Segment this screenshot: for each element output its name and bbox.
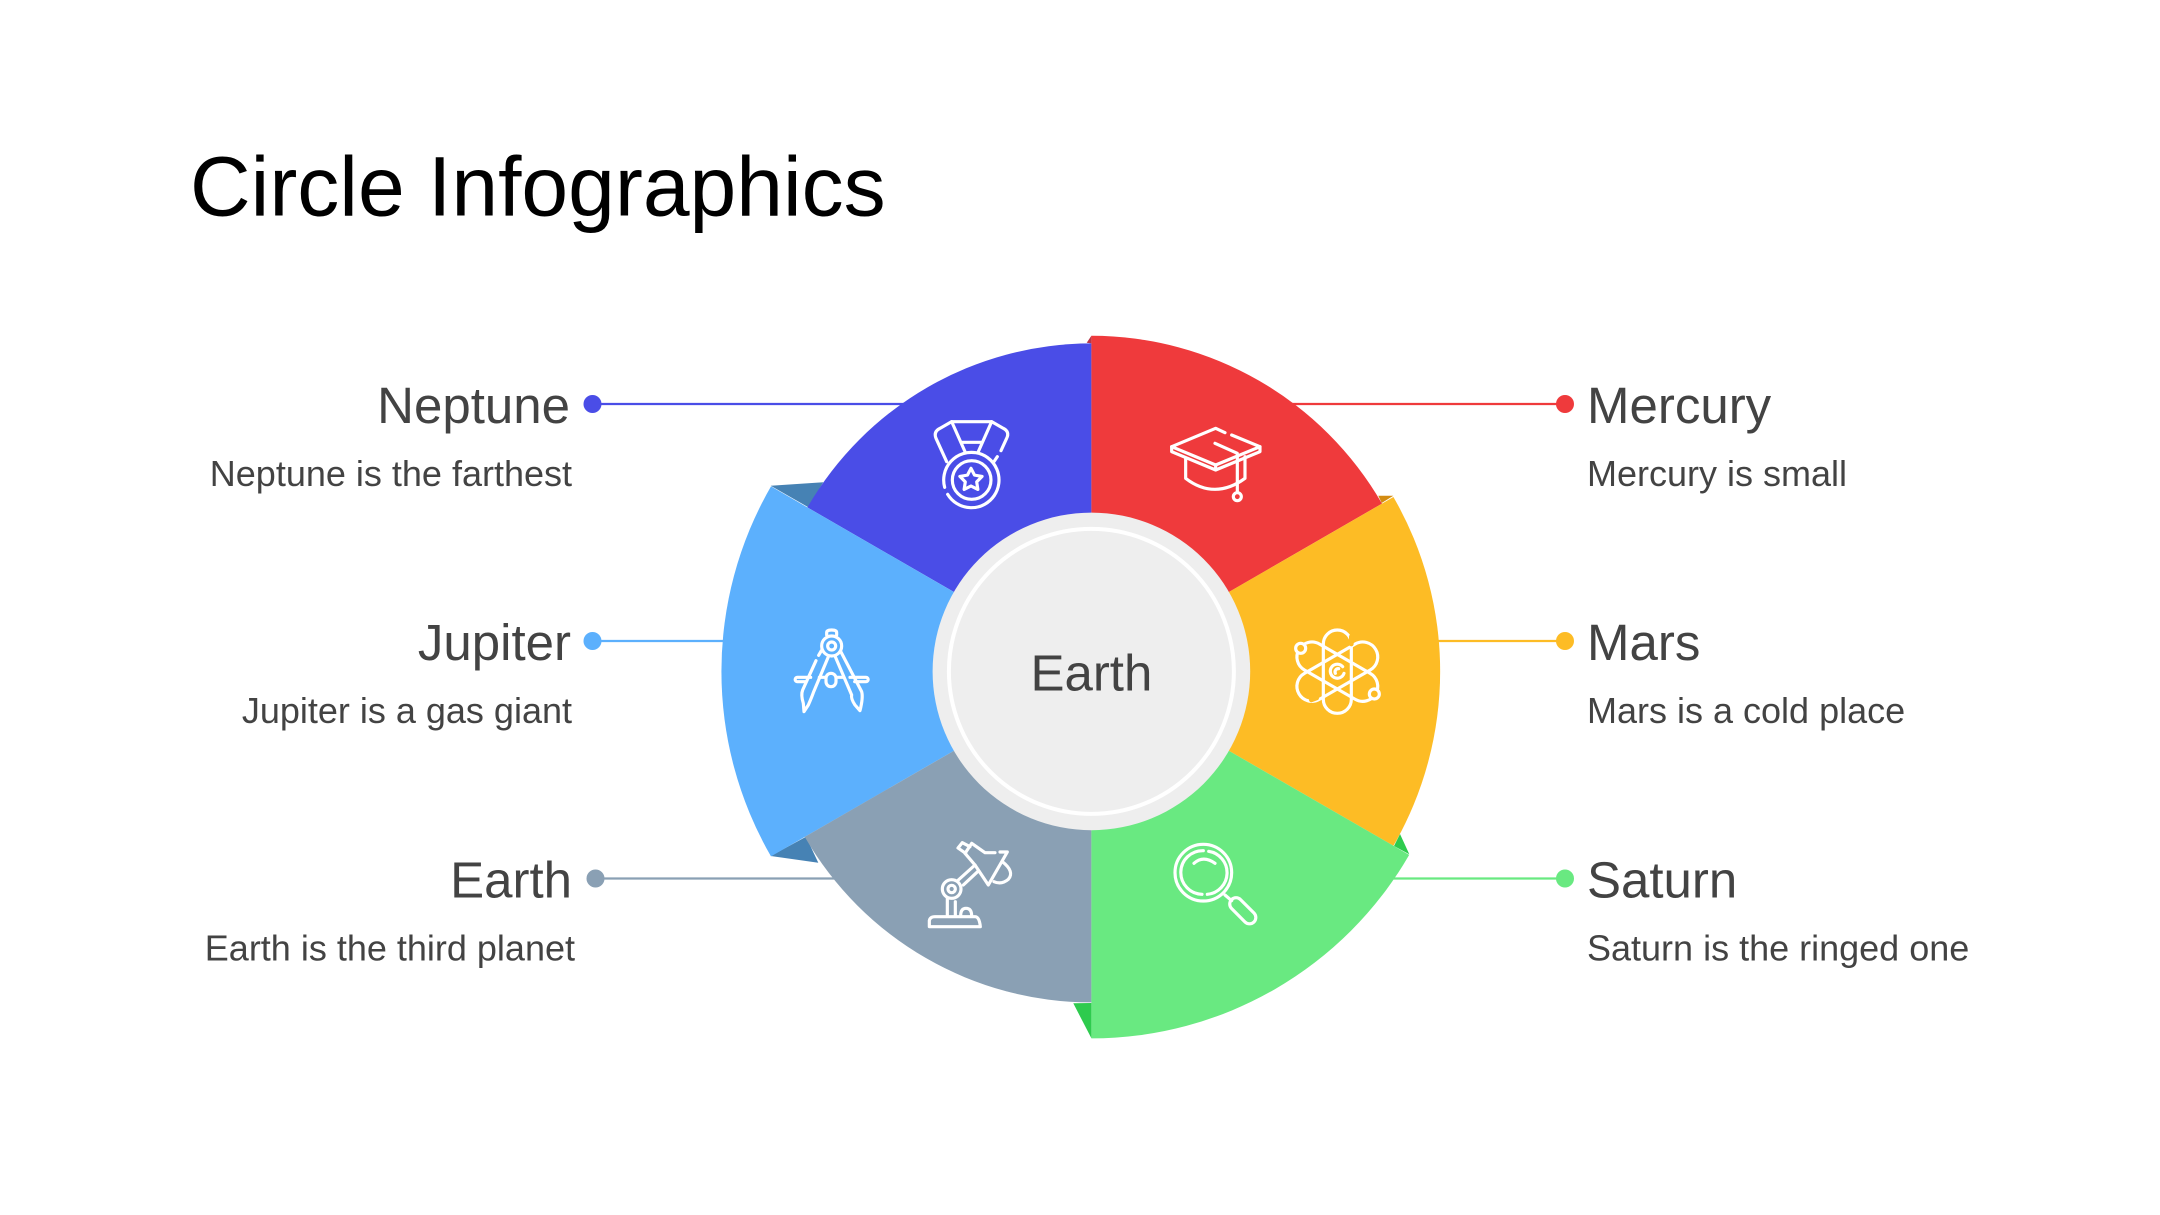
icon: medal: [935, 422, 1008, 508]
label: Neptune: Neptune is the farthest: [210, 453, 572, 494]
icon: atom: [1291, 630, 1383, 713]
label: Earth: Earth is the third planet: [205, 928, 575, 968]
connector: Neptune: [584, 395, 930, 413]
connector: Saturn: [1390, 870, 1574, 888]
segment: Saturn: [1091, 671, 1409, 1038]
segment: Mars: [1091, 497, 1440, 846]
label: Mercury: [1587, 377, 1847, 494]
connector: Jupiter: [584, 632, 735, 650]
icon: graduation cap: [1172, 428, 1260, 501]
icon: magnifying glass: [1175, 844, 1258, 926]
label: Saturn: Saturn is the ringed one: [1587, 928, 1969, 968]
connector: Mars: [1430, 632, 1574, 650]
icon: compass: [795, 630, 868, 712]
label: Saturn: Saturn: [1587, 852, 1737, 908]
segment: Mercury: [1091, 336, 1382, 671]
connector: Earth: [586, 870, 850, 888]
label: Mercury: Mercury is small: [1587, 453, 1847, 494]
label: Earth: [205, 852, 575, 968]
label: Jupiter: Jupiter: [418, 614, 571, 671]
label: Saturn: [1587, 852, 1969, 968]
label: Jupiter: Jupiter is a gas giant: [242, 690, 572, 731]
label: Jupiter: [242, 614, 572, 731]
title: Circle Infographics: [190, 140, 886, 234]
connector: Mercury: [1260, 395, 1574, 413]
segment: Neptune: [807, 343, 1091, 671]
label: Mars: Mars is a cold place: [1587, 690, 1905, 731]
icon: lamp: [929, 843, 1011, 927]
label: Mars: Mars: [1587, 614, 1700, 671]
segment: Jupiter: [721, 486, 1091, 856]
center circle: [933, 513, 1250, 830]
label: Neptune: [210, 377, 572, 494]
center circle: Earth: [1030, 644, 1152, 702]
label: Earth: Earth: [450, 852, 572, 908]
label: Mars: [1587, 614, 1905, 731]
label: Neptune: Neptune: [377, 377, 570, 434]
label: Mercury: Mercury: [1587, 377, 1772, 434]
fold shadows behind segments: [771, 336, 1409, 1038]
segment: Earth: [805, 671, 1091, 1002]
